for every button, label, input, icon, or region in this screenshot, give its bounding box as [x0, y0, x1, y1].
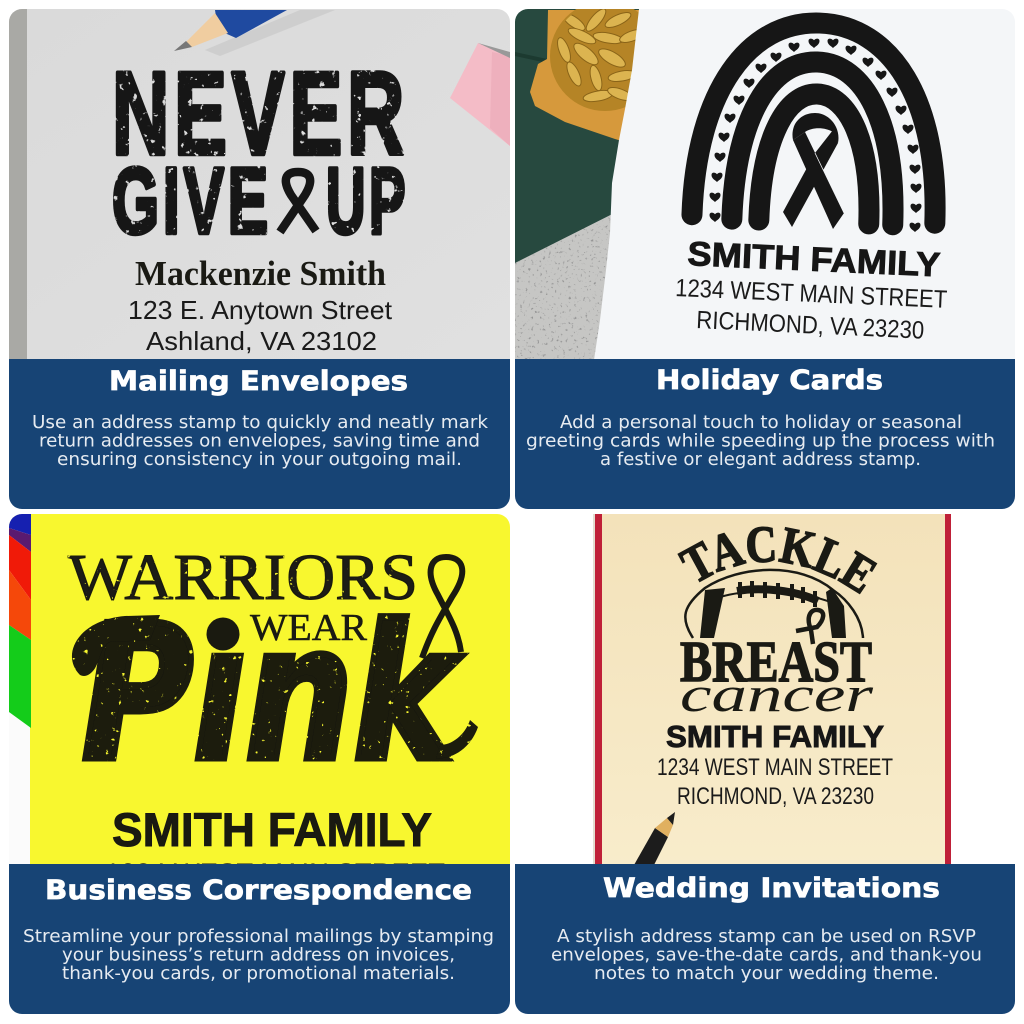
caption band: business correspondence — [9, 864, 510, 1014]
icon: black pencil — [634, 812, 675, 865]
family name: SMITH FAMILY — [112, 803, 432, 856]
icon: rainbow with hearts — [692, 19, 942, 232]
description: your business’s return address on invoices, — [62, 944, 455, 966]
description: A stylish address stamp can be used on RSVP — [557, 926, 976, 947]
heading: Mailing Envelopes — [109, 366, 408, 397]
warriors line: WARRIORS — [68, 541, 418, 614]
icon: pink eraser — [450, 43, 510, 146]
distressed lettering: NEVER — [112, 48, 409, 180]
description — [23, 926, 494, 984]
description: a festive or elegant address stamp. — [600, 449, 921, 470]
icon: gold wax seal — [530, 9, 639, 140]
description — [32, 412, 489, 470]
heading: Business Correspondence — [45, 875, 472, 906]
address line one: 1234 WEST MAIN STREET — [675, 274, 948, 314]
icon: football — [685, 570, 863, 644]
caption band: wedding invitations — [515, 864, 1015, 1014]
arched word: tackle — [677, 526, 878, 594]
description: ensuring consistency in your outgoing mail. — [57, 449, 462, 470]
word: cancer: cancer — [680, 666, 874, 722]
family name: SMITH FAMILY — [687, 235, 941, 284]
i dot repaint — [206, 613, 250, 650]
icon: pencil — [174, 10, 287, 51]
photo: tackle breast cancer stamp on cream card — [593, 514, 951, 864]
panel: wedding invitations — [515, 514, 1015, 1014]
description: notes to match your wedding theme. — [594, 963, 939, 984]
distressed lettering — [113, 70, 405, 236]
pink script word: Pink — [82, 585, 462, 802]
description: thank-you cards, or promotional materials. — [62, 963, 455, 984]
wear line: WEAR — [250, 607, 368, 649]
panel: mailing envelopes — [9, 9, 510, 509]
caption band: mailing envelopes — [9, 359, 510, 509]
address line two: Ashland, VA 23102 — [146, 326, 377, 356]
pink script word — [72, 613, 478, 762]
description — [526, 412, 995, 470]
address line two: RICHMOND, VA 23230 — [677, 783, 874, 810]
caption band: holiday cards — [515, 359, 1015, 509]
cropped address line: 1234 WEST MAIN STREET — [105, 858, 445, 891]
heading: Holiday Cards — [656, 365, 883, 396]
heading: Wedding Invitations — [603, 873, 940, 904]
colour paper edges — [9, 514, 31, 728]
address line one: 123 E. Anytown Street — [128, 295, 393, 325]
torn white paper — [594, 9, 1015, 360]
pink word swashes and round dot — [72, 615, 478, 758]
panel: holiday cards — [515, 1, 1015, 509]
description: Use an address stamp to quickly and neatly mark — [32, 412, 489, 433]
description: greeting cards while speeding up the process with — [526, 430, 995, 452]
description: Streamline your professional mailings by stamping — [23, 926, 494, 947]
icon: awareness ribbon — [783, 113, 844, 229]
panel: business correspondence — [9, 514, 510, 1014]
distressed lettering: GIVE — [112, 148, 272, 253]
word: breast: BREAST — [680, 629, 872, 694]
distressed lettering: UP — [326, 148, 409, 253]
name: Mackenzie Smith: Mackenzie Smith — [135, 254, 386, 293]
address line two: RICHMOND, VA 23230 — [696, 306, 925, 345]
description — [551, 926, 982, 984]
stamp artwork: never give up — [113, 70, 405, 236]
address line one: 1234 WEST MAIN STREET — [657, 754, 893, 781]
photo: rainbow stamp on torn paper — [515, 1, 1015, 360]
arched word: tackle: TACKLE — [677, 526, 878, 594]
icon: small ribbon — [796, 610, 823, 644]
family name: SMITH FAMILY — [666, 719, 884, 754]
description: Add a personal touch to holiday or seasonal — [560, 412, 962, 433]
photo: never give up stamp on paper — [9, 9, 510, 360]
icon: awareness ribbon — [280, 172, 316, 232]
description: return addresses on envelopes, saving time and — [39, 430, 480, 452]
description: envelopes, save-the-date cards, and thank-you — [551, 944, 982, 966]
icon: awareness ribbon outline — [422, 557, 462, 658]
photo: warriors wear pink stamp on yellow paper — [9, 514, 510, 891]
